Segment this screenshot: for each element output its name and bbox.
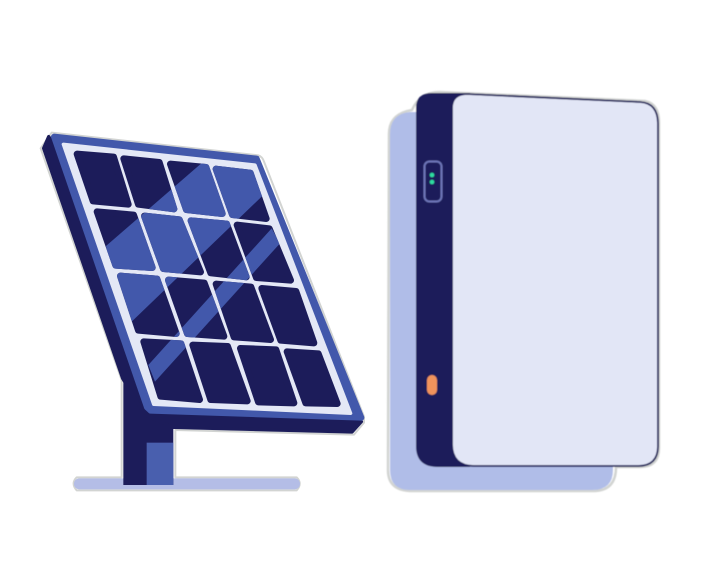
battery back slab: [390, 112, 613, 490]
panel dark side edge: [44, 137, 361, 432]
cell reflections: [106, 162, 280, 382]
battery outline halo: [388, 92, 659, 491]
orange button: [427, 375, 437, 395]
panel blue frame: [54, 137, 361, 418]
home battery: [388, 92, 659, 491]
solar panel: [41, 133, 364, 490]
panel outline halo: [41, 133, 364, 490]
green leds: [430, 173, 434, 184]
battery dark body: [416, 93, 470, 467]
stand highlight: [147, 443, 173, 485]
base plate: [74, 478, 300, 489]
stand post: [123, 377, 173, 485]
narrow diagonal reflection: [148, 228, 280, 382]
solar cell grid: [77, 154, 337, 404]
battery front face: [452, 94, 658, 466]
wide diagonal reflection: [106, 162, 263, 322]
status indicator: [424, 162, 442, 202]
illustration: solar panel and battery: [40, 90, 661, 493]
panel white frame: [63, 144, 351, 413]
